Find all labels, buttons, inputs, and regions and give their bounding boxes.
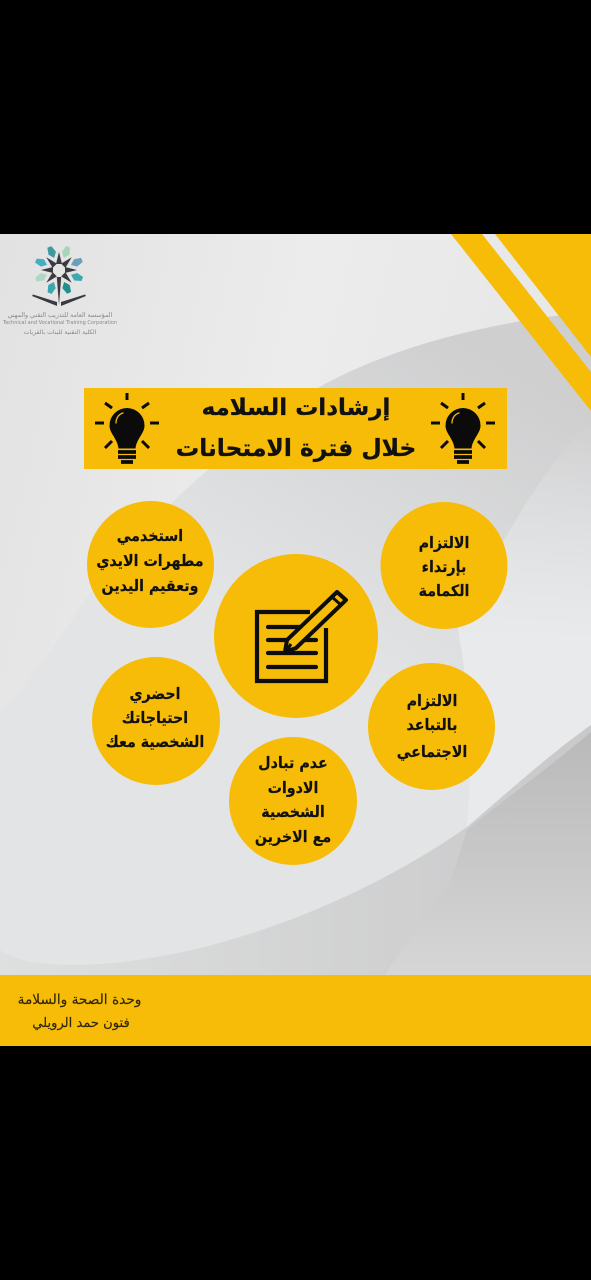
tip: right circle: الالتزام	[407, 691, 457, 710]
tip: top right circle: الالتزام	[419, 533, 469, 552]
tip: bottom circle: الشخصية	[261, 802, 325, 821]
tip: right circle: الاجتماعي	[397, 742, 467, 761]
title text: إرشادات السلامه	[202, 395, 390, 421]
tip: bottom circle	[229, 737, 357, 865]
tip: bottom circle: مع الاخرين	[255, 827, 331, 846]
icon: document and pencil	[257, 592, 346, 681]
tip: top left circle: وتعقيم اليدين	[102, 576, 198, 595]
tip: top right circle	[380, 502, 508, 629]
logo emblem	[32, 245, 86, 306]
icon: right light bulb	[431, 393, 495, 462]
background panel with grey swooshes	[0, 234, 591, 975]
footer credits: وحدة الصحة والسلامة	[18, 992, 141, 1008]
tip: top left circle: استخدمي	[117, 526, 183, 545]
tip: left circle: الشخصية معك	[106, 732, 204, 751]
tip: bottom circle: الادوات	[268, 778, 318, 797]
tip: bottom circle: عدم تبادل	[258, 753, 328, 772]
logo caption: Technical and Vocational Training Corporation	[2, 320, 117, 326]
central circle with writing icon	[214, 554, 378, 718]
tip: left circle	[92, 657, 220, 785]
footer credits	[18, 992, 141, 1031]
tip: top left circle: مطهرات الايدي	[96, 551, 204, 571]
logo caption: المؤسسة العامة للتدريب التقني والمهني	[8, 312, 113, 319]
title banner	[84, 388, 507, 469]
tip: right circle	[368, 663, 495, 790]
logo caption: الكلية التقنية للبنات بالقريات	[24, 329, 97, 336]
footer band	[0, 975, 591, 1046]
tip: left circle: احتياجاتك	[122, 708, 188, 727]
title text: خلال فترة الامتحانات	[176, 434, 416, 462]
tip: right circle: بالتباعد	[407, 715, 457, 734]
corner stripes	[451, 234, 591, 411]
logo caption	[2, 312, 117, 336]
black upper band	[0, 0, 591, 234]
tip: left circle: احضري	[129, 684, 181, 704]
footer credits: فتون حمد الرويلي	[32, 1016, 130, 1031]
tip: top left circle	[87, 501, 214, 628]
icon: left light bulb	[95, 393, 159, 462]
tip: top right circle: الكمامة	[419, 581, 469, 600]
tip: top right circle: بإرتداء	[422, 557, 466, 576]
title text	[176, 395, 416, 462]
logo	[2, 245, 117, 336]
